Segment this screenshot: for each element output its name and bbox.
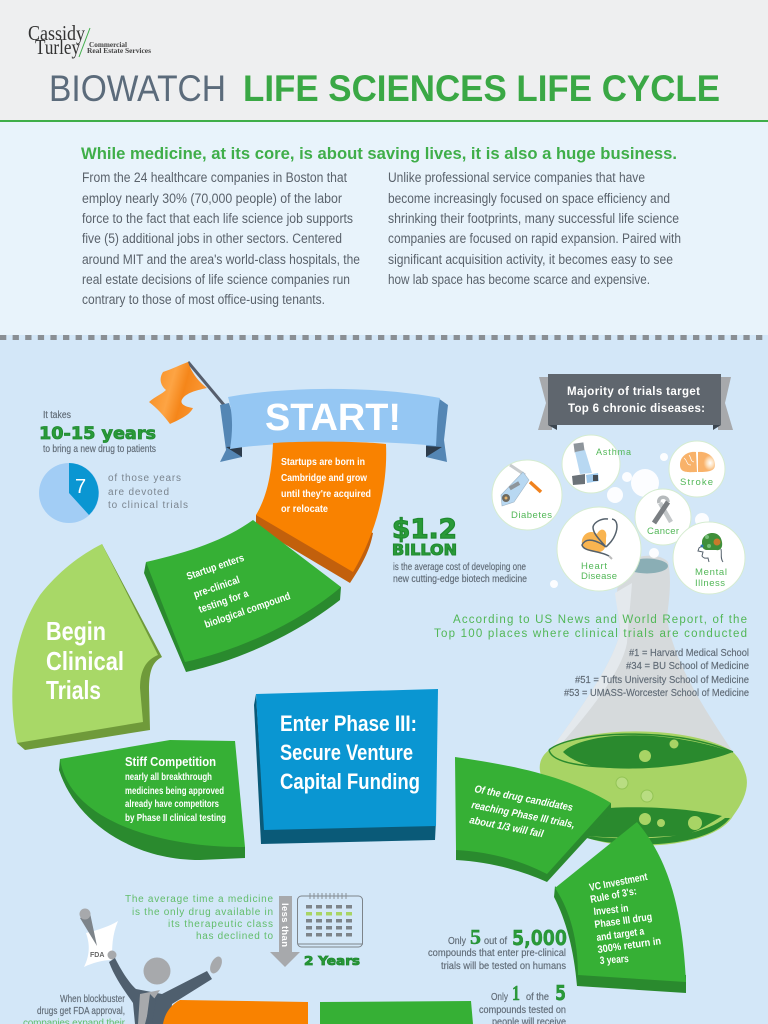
icon: diabetes: Diabetes xyxy=(511,510,552,521)
VC text: Invest in xyxy=(593,902,629,918)
stat: 5 out of 5000: Only xyxy=(448,935,467,947)
clinical trials years text: of those years xyxy=(108,473,181,484)
pie chart: 7 years: 7 xyxy=(75,476,86,498)
text: blockbuster drugs xyxy=(23,993,126,1024)
intro right column: become increasingly focused on space efficiency and xyxy=(388,191,670,206)
icon: cancer xyxy=(635,489,691,545)
begin clinical text: Begin xyxy=(46,616,106,646)
start label: START! xyxy=(265,397,401,439)
logo: Commercial xyxy=(89,40,127,49)
intro right column: Unlike professional service companies that have xyxy=(388,170,645,185)
icon: cancer: Cancer xyxy=(647,526,679,537)
clinical trials years text xyxy=(108,473,188,511)
banner: chronic diseases: Majority of trials target xyxy=(567,386,700,398)
text: exclusivity time: its therapeutic class xyxy=(168,919,273,930)
VC text: and target a xyxy=(596,925,645,944)
begin clinical text xyxy=(46,616,124,705)
segment: begin clinical trials xyxy=(12,544,162,750)
icon: businessman with FDA approval: FDA xyxy=(90,952,104,959)
text: exclusivity time: has declined to xyxy=(196,931,273,942)
intro right column xyxy=(388,170,681,287)
panel: intro xyxy=(0,122,768,335)
icon: flag xyxy=(149,362,224,424)
icon: mental illness: Illness xyxy=(695,578,725,589)
stat: 5 out of 5000: trials will be tested on humans xyxy=(441,960,566,972)
intro left column: From the 24 healthcare companies in Boston that xyxy=(82,170,347,185)
startups text xyxy=(281,456,371,515)
intro left column: five (5) additional jobs in other sectors. Centered xyxy=(82,231,342,246)
text: exclusivity time: The average time a medicine xyxy=(125,894,273,905)
text: US news report: #51 = Tufts University School of Medicine xyxy=(575,674,749,686)
text: blockbuster drugs: drugs get FDA approval, xyxy=(37,1005,125,1017)
icon: asthma: Asthma xyxy=(596,447,631,457)
start ribbon xyxy=(220,389,448,462)
stat: 10-15 years: to bring a new drug to patients xyxy=(43,443,156,455)
intro left column: real estate decisions of life science companies run xyxy=(82,272,350,287)
VC text: VC Investment xyxy=(588,871,649,894)
banner: chronic diseases xyxy=(538,374,733,430)
stat: 1.2 billion: new cutting-edge biotech medicine xyxy=(393,573,527,585)
flask liquid xyxy=(540,731,747,846)
stat: 1 of 5: 5 xyxy=(555,981,566,1005)
segment: bottom orange xyxy=(163,1000,308,1024)
arrow: less than xyxy=(270,896,300,967)
stat: 1 of 5 xyxy=(479,981,566,1024)
stat: 1.2 billion: is the average cost of developing one xyxy=(393,561,526,573)
VC text: 3 years xyxy=(599,953,629,967)
VC text: Phase III drug xyxy=(594,911,653,931)
intro right column: how lab space has become scarce and expensive. xyxy=(388,272,650,287)
intro left column xyxy=(82,170,360,307)
banner: chronic diseases: Top 6 chronic diseases: xyxy=(568,403,705,415)
drug candidates text: about 1/3 will fail xyxy=(468,814,545,840)
text: US news report xyxy=(434,614,749,699)
icon: mental illness: Mental xyxy=(695,567,727,578)
stat: 1.2 billion: BILLON xyxy=(392,541,457,559)
begin clinical text: Trials xyxy=(46,675,101,705)
intro left column: around MIT and the area's world-class hospitals, the xyxy=(82,252,360,267)
stiff competition text: Stiff Competition xyxy=(125,755,216,769)
intro right column: shrinking their footprints, many successful life science xyxy=(388,211,679,226)
phase III text: Enter Phase III: xyxy=(280,711,417,736)
text: exclusivity time: is the only drug available in xyxy=(132,907,273,918)
icon: asthma xyxy=(562,435,631,493)
drug candidates text: Of the drug candidates xyxy=(473,783,574,814)
icon: stroke xyxy=(669,441,725,497)
icon: heart disease: Disease xyxy=(581,571,617,582)
text: US news report: #34 = BU School of Medicine xyxy=(626,660,749,672)
header band xyxy=(0,0,768,122)
icon: calendar xyxy=(298,893,363,947)
phase III text: Secure Venture xyxy=(280,740,413,765)
decorative bubbles xyxy=(550,453,709,588)
segment: VC rule of 3s xyxy=(554,822,686,993)
VC text xyxy=(588,871,662,967)
stat: 1 of 5: Only xyxy=(491,991,509,1003)
icon: heart disease xyxy=(557,507,641,591)
stiff competition text: already have competitors xyxy=(125,798,219,810)
phase III text xyxy=(280,711,420,794)
stat: 10-15 years: 10-15 years xyxy=(39,424,156,444)
stat: 5 out of 5000: out of xyxy=(484,935,507,947)
startups text: until they're acquired xyxy=(281,488,371,500)
flask xyxy=(540,556,747,846)
pie chart: 7 years xyxy=(39,463,99,523)
segment: startups xyxy=(256,442,386,583)
stat: 5 out of 5000: 5 xyxy=(470,925,481,949)
intro right column: companies are focused on rapid expansion. Paired with xyxy=(388,231,681,246)
stiff competition text: nearly all breakthrough xyxy=(125,771,212,783)
segment: pre-clinical xyxy=(144,520,341,672)
begin clinical text: Clinical xyxy=(46,646,124,676)
pre-clinical text: biological compound xyxy=(203,590,292,631)
pre-clinical text: Startup enters xyxy=(185,552,246,583)
intro left column: employ nearly 30% (70,000 people) of the labor xyxy=(82,191,342,206)
stat: 5 out of 5000: 5,000 xyxy=(512,926,567,950)
VC text: Rule of 3's: xyxy=(589,885,638,906)
VC text: 300% return in xyxy=(597,935,662,956)
text: exclusivity time xyxy=(125,894,273,942)
icon: heart disease: Heart xyxy=(581,561,607,572)
title: BIOWATCH xyxy=(49,68,226,109)
intro left column: contrary to those of most office-using tenants. xyxy=(82,292,325,307)
panel: enter phase III xyxy=(254,689,438,844)
title: LIFE SCIENCES LIFE CYCLE xyxy=(243,68,720,109)
drug candidates text: reaching Phase III trials, xyxy=(470,799,576,831)
stat: 10-15 years xyxy=(39,410,156,455)
drug candidates text xyxy=(468,783,576,840)
stat: 1.2 billion xyxy=(392,514,527,585)
stat: 1.2 billion: $1.2 xyxy=(392,514,457,545)
title xyxy=(49,68,720,109)
icon: diabetes xyxy=(492,460,562,530)
icon: mental illness xyxy=(673,522,745,594)
stiff competition text: medicines being approved xyxy=(125,785,224,797)
startups text: or relocate xyxy=(281,503,328,515)
stat: 1 of 5: 1 xyxy=(512,981,520,1005)
pre-clinical text xyxy=(185,552,292,631)
stat: 5 out of 5000 xyxy=(428,925,567,972)
intro right column: significant acquisition activity, it becomes easy to see xyxy=(388,252,673,267)
segment: bottom green xyxy=(320,1001,473,1024)
stat: 1 of 5: compounds tested on xyxy=(479,1004,566,1016)
logo: Real Estate Services xyxy=(87,46,151,55)
stat: 10-15 years: It takes xyxy=(43,410,71,421)
pre-clinical text: testing for a xyxy=(197,588,250,616)
text: blockbuster drugs: When blockbuster xyxy=(60,993,125,1005)
stiff competition text: by Phase II clinical testing xyxy=(125,812,226,824)
logo xyxy=(28,21,151,59)
intro heading: While medicine, at its core, is about saving lives, it is also a huge business. xyxy=(81,145,677,163)
stat: 1 of 5: of the xyxy=(526,991,549,1003)
intro left column: force to the fact that each life science job supports xyxy=(82,211,353,226)
text: US news report: Top 100 places where clinical trials are conducted xyxy=(434,628,747,640)
pre-clinical text: pre-clinical xyxy=(192,574,241,601)
segment: stiff competition xyxy=(59,740,245,860)
icon: stroke: Stroke xyxy=(680,477,713,488)
text: US news report: #1 = Harvard Medical School xyxy=(629,647,749,659)
stat: 5 out of 5000: compounds that enter pre-clinical xyxy=(428,947,566,959)
phase III text: Capital Funding xyxy=(280,769,420,794)
clinical trials years text: to clinical trials xyxy=(108,500,188,511)
arrow: less than: less than xyxy=(279,903,290,947)
icon: businessman with FDA approval xyxy=(80,908,224,1024)
text: US news report: #53 = UMASS-Worcester School of Medicine xyxy=(564,687,749,699)
startups text: Startups are born in xyxy=(281,456,365,468)
clinical trials years text: are devoted xyxy=(108,487,169,498)
text: US news report: According to US News and World Report, of the xyxy=(453,614,747,626)
logo: Turley xyxy=(35,35,80,59)
logo: Cassidy xyxy=(28,21,85,45)
label: 2 years: 2 Years xyxy=(304,954,360,968)
startups text: Cambridge and grow xyxy=(281,472,368,484)
segment: drug candidates xyxy=(455,757,611,882)
stiff competition text xyxy=(125,755,226,824)
